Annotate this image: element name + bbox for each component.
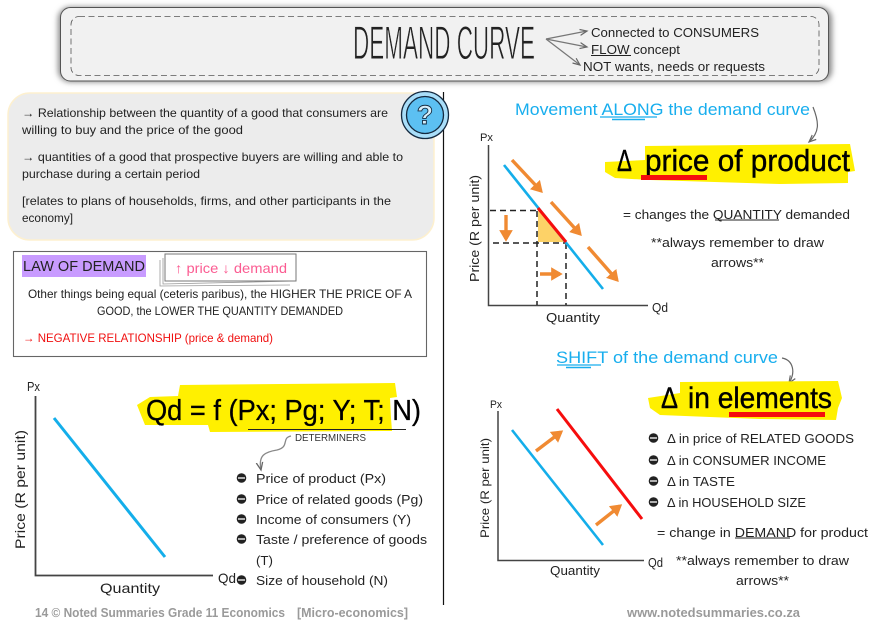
chart: demand curve: Qd xyxy=(218,570,236,586)
list: determiners: Price of product (Px) xyxy=(256,471,386,486)
callout: price and demand xyxy=(160,254,296,286)
list: determiners: Taste / preference of goods xyxy=(256,532,428,547)
chart: shift of the curve: Quantity xyxy=(550,564,601,578)
list: determiners: (T) xyxy=(256,553,273,568)
icon: question mark xyxy=(402,92,448,138)
chart: movement along the curve: Qd xyxy=(652,300,668,315)
list: determiners: Size of household (N) xyxy=(256,573,388,588)
text: movement notes: arrows** xyxy=(711,255,764,270)
callout: title notes: FLOW concept xyxy=(591,42,680,57)
highlight: in elements: in elements xyxy=(688,382,832,415)
list: determiners: Price of related goods (Pg) xyxy=(256,492,423,507)
callout: title notes: NOT wants, needs or requests xyxy=(583,59,766,74)
panel: definition: → Relationship between the quantity of a good that consumers are xyxy=(22,106,388,120)
chart: shift of the curve: Price (R per unit) xyxy=(478,438,492,538)
label: determiners xyxy=(260,432,366,470)
text: shift notes: = change in DEMAND for product xyxy=(657,525,868,540)
panel: definition xyxy=(8,93,434,240)
heading: law of demand: LAW OF DEMAND xyxy=(23,258,145,275)
chart: shift of the curve xyxy=(478,399,663,578)
chart: movement along the curve: Px xyxy=(480,132,493,144)
list: determiners xyxy=(237,471,428,588)
label: determiners: DETERMINERS xyxy=(295,432,366,444)
panel: definition: economy] xyxy=(22,211,73,225)
heading: shift xyxy=(556,348,793,383)
icon: question mark: ? xyxy=(417,100,433,130)
chart: movement along the curve xyxy=(468,132,668,325)
title banner xyxy=(58,7,832,82)
panel: law of demand xyxy=(14,252,426,356)
callout: title notes xyxy=(546,25,766,74)
chart: shift of the curve: Px xyxy=(490,399,502,411)
callout: title notes: Connected to CONSUMERS xyxy=(591,25,759,40)
panel: law of demand: → NEGATIVE RELATIONSHIP (price & demand) xyxy=(23,331,273,345)
heading: movement along xyxy=(515,100,817,142)
list: elements xyxy=(649,431,854,510)
panel: definition: → quantities of a good that prospective buyers are willing and able to xyxy=(22,150,403,164)
list: elements: Δ in TASTE xyxy=(667,474,735,489)
chart: movement along the curve: Quantity xyxy=(546,310,601,325)
highlight: price of product: Δ xyxy=(617,143,632,178)
chart: shift of the curve: Qd xyxy=(648,556,663,570)
panel: definition: willing to buy and the price of the good xyxy=(21,123,243,137)
text: movement notes xyxy=(623,207,850,270)
list: determiners: Income of consumers (Y) xyxy=(256,512,411,527)
panel: law of demand: GOOD, the LOWER THE QUANTITY DEMANDED xyxy=(97,304,343,318)
panel: law of demand: Other things being equal (ceteris paribus), the HIGHER THE PRICE OF A xyxy=(28,287,412,301)
footer: left: [Micro-economics] xyxy=(297,605,408,620)
text: movement notes: **always remember to draw xyxy=(651,235,825,250)
chart: demand curve xyxy=(12,379,236,596)
callout: price and demand: ↑ price ↓ demand xyxy=(175,260,287,276)
list: elements: Δ in CONSUMER INCOME xyxy=(667,453,826,468)
heading: shift: SHIFT of the demand curve xyxy=(556,348,778,367)
highlight: in elements: Δ xyxy=(661,382,678,415)
list: elements: Δ in HOUSEHOLD SIZE xyxy=(667,495,806,510)
heading: movement along: Movement ALONG the demand curve xyxy=(515,100,810,119)
list: elements: Δ in price of RELATED GOODS xyxy=(667,431,854,446)
highlight: in elements xyxy=(648,381,842,420)
chart: movement along the curve: Price (R per unit) xyxy=(468,175,482,282)
chart: demand curve: Price (R per unit) xyxy=(12,430,28,549)
divider xyxy=(442,92,444,605)
text: shift notes: arrows** xyxy=(736,573,789,588)
panel: definition: [relates to plans of households, firms, and other participants in the xyxy=(22,194,391,208)
formula: Qd = f (Px; Pg; Y; T; N) xyxy=(146,395,421,427)
title banner: DEMAND CURVE xyxy=(353,16,535,69)
panel: definition: purchase during a certain period xyxy=(22,167,200,181)
text: movement notes: = changes the QUANTITY demanded xyxy=(623,207,850,222)
footer: website: www.notedsummaries.co.za xyxy=(626,605,801,620)
footer: left: 14 © Noted Summaries Grade 11 Economics xyxy=(35,605,285,620)
highlight: price of product: price of product xyxy=(645,143,850,178)
text: shift notes xyxy=(657,525,868,588)
text: shift notes: **always remember to draw xyxy=(676,553,850,568)
formula xyxy=(137,383,421,432)
chart: demand curve: Px xyxy=(27,379,40,394)
chart: demand curve: Quantity xyxy=(100,580,160,596)
